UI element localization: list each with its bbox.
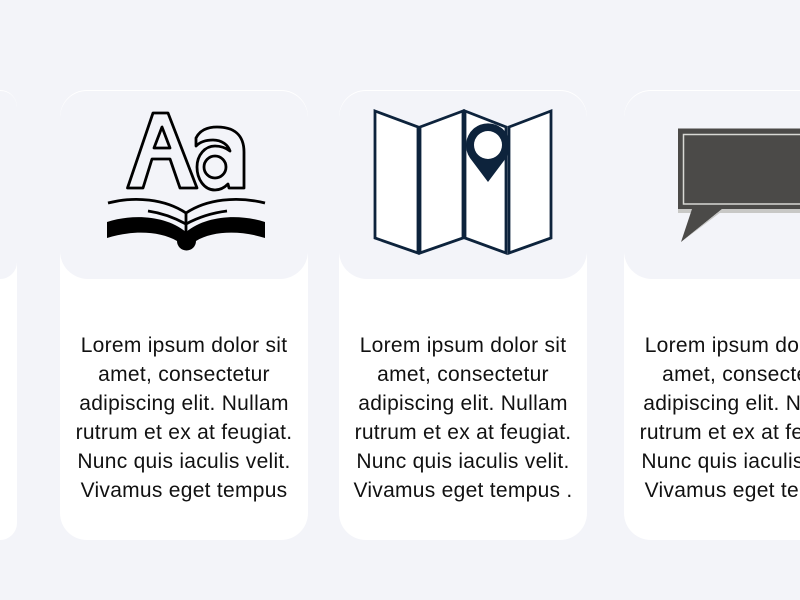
panel: map card — [339, 90, 587, 540]
text block: typography: adipiscing elit. Nullam — [79, 392, 289, 414]
text block: map: amet, consectetur — [377, 362, 549, 386]
text block: speech — [640, 334, 800, 502]
text block: typography — [76, 334, 292, 502]
text block: typography: Nunc quis iaculis velit. — [77, 450, 291, 472]
text block: map: Lorem ipsum dolor sit — [360, 334, 566, 356]
text block: map: Nunc quis iaculis velit. — [356, 450, 570, 472]
text block: map: Vivamus eget tempus . — [353, 478, 573, 502]
panel: left card (cropped) — [0, 90, 17, 540]
text block: typography: Lorem ipsum dolor sit — [81, 334, 287, 356]
panel: speech card (cropped) — [624, 90, 800, 540]
panel: typography card — [60, 90, 308, 540]
text block: map: adipiscing elit. Nullam — [358, 392, 568, 414]
text block: typography: Vivamus eget tempus — [81, 478, 287, 502]
text block: typography: amet, consectetur — [98, 362, 270, 386]
text block: typography: rutrum et ex at feugiat. — [76, 420, 292, 444]
text block: map: rutrum et ex at feugiat. — [355, 420, 571, 444]
text block: map — [353, 334, 573, 502]
